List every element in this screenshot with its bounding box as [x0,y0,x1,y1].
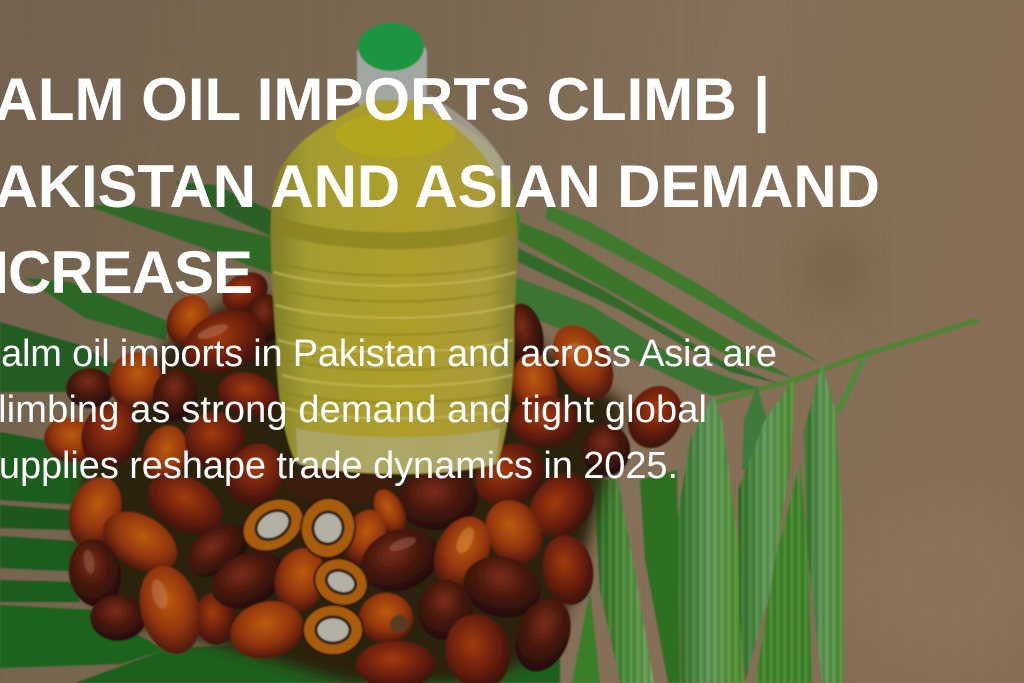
description text [0,333,777,487]
bottle cap [358,23,424,71]
description text: supplies reshape trade dynamics in 2025. [0,445,678,487]
oil bottle [271,23,519,474]
fruit shadow bed [80,295,625,683]
palm leaves: right frond [510,205,978,683]
palm leaves: left fronds [0,182,560,683]
bottle collar [357,45,427,107]
upper fruits [39,264,692,517]
palm fruit pile [39,264,692,683]
description text: Palm oil imports in Pakistan and across Asia are [0,333,777,375]
bottle body [271,100,517,474]
lower fruits [59,431,607,683]
stem [716,320,978,402]
leaf stripes [677,395,743,683]
description text: climbing as strong demand and tight global [0,389,707,431]
bottle label tab [496,205,519,303]
title [0,66,880,306]
cut fruit halves [233,488,374,655]
